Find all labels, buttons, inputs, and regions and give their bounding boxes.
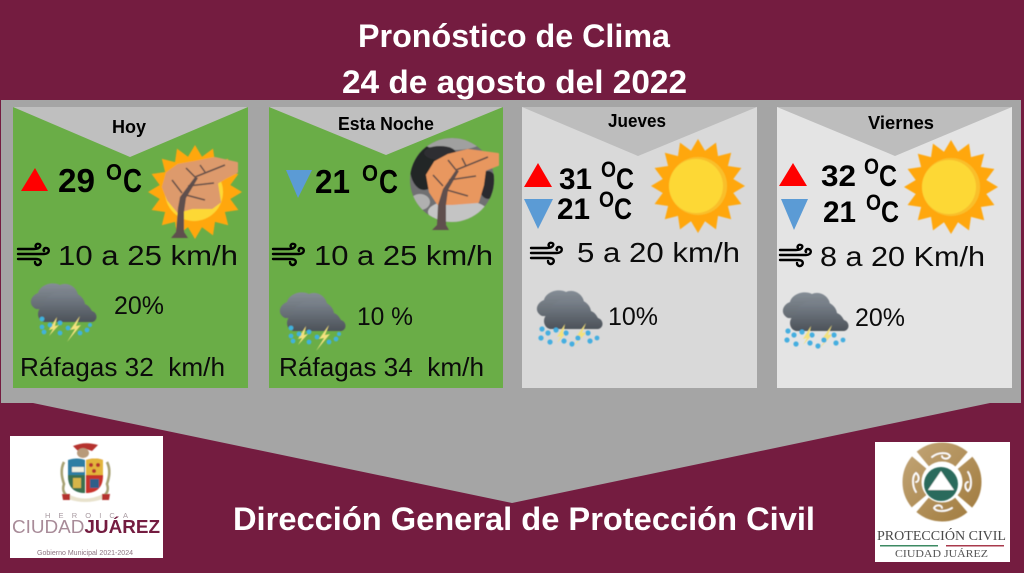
- rain probability: 20%: [114, 292, 164, 320]
- crest: [62, 443, 110, 502]
- high temperature: O: [864, 154, 879, 179]
- logo: Heroica Ciudad Juárez: [10, 436, 163, 558]
- wind speed: 10 a 25 km/h: [58, 240, 238, 271]
- text: Ciudad Juárez: CIUDAD JUÁREZ: [895, 548, 988, 560]
- high temperature: 32: [821, 160, 856, 193]
- icon: blue down triangle: [524, 199, 553, 229]
- text: Protección Civil: PROTECCIÓN CIVIL: [877, 527, 1006, 544]
- high temperature: O: [106, 159, 122, 185]
- low temperature: [557, 187, 632, 226]
- icon: wind: [531, 243, 562, 264]
- heading: Hoy: Hoy: [112, 117, 146, 137]
- title: Pronóstico de Clima: [358, 18, 670, 54]
- gray forecast band with chevron: [1, 100, 1021, 503]
- icon: storm cloud and rain: [537, 290, 602, 347]
- footer heading: Dirección General de Protección Civil: [233, 501, 815, 537]
- rain probability: 10 %: [357, 303, 413, 331]
- high temperature: [58, 159, 142, 199]
- low temperature: 21: [823, 196, 856, 229]
- high temperature: 29: [58, 162, 95, 199]
- low temperature: C: [881, 196, 899, 229]
- icon: wind: [273, 244, 304, 265]
- panel: Esta Noche: [269, 107, 503, 388]
- icon: wind: [780, 245, 811, 266]
- icon: sun: [651, 139, 745, 233]
- logo: Protección Civil: [875, 442, 1010, 562]
- low temperature: [315, 160, 398, 200]
- low temperature: C: [379, 163, 398, 200]
- icon: moon with windy tree: [410, 136, 498, 230]
- text: Ciudad Juárez: CIUDADJUÁREZ: [12, 516, 160, 537]
- high temperature: C: [879, 160, 897, 193]
- wind speed: 5 a 20 km/h: [577, 237, 740, 268]
- low temperature: 21: [557, 193, 590, 226]
- wind speed: 10 a 25 km/h: [314, 240, 493, 271]
- gusts: Ráfagas 32 km/h: [20, 352, 225, 382]
- gusts: Ráfagas 34 km/h: [279, 352, 484, 382]
- high temperature: C: [123, 162, 142, 199]
- heading: Jueves: Jueves: [608, 111, 666, 131]
- panel: Viernes: [777, 107, 1012, 388]
- high temperature: 31: [559, 163, 592, 196]
- heading: Viernes: Viernes: [868, 113, 934, 133]
- low temperature: O: [599, 187, 614, 212]
- high temperature: C: [616, 163, 634, 196]
- low temperature: O: [866, 190, 881, 215]
- icon: red up triangle: [779, 163, 807, 186]
- icon: blue down triangle: [286, 170, 312, 198]
- icon: sun: [904, 140, 998, 234]
- icon: wind: [18, 244, 49, 265]
- high temperature: O: [601, 157, 616, 182]
- title: [342, 18, 687, 100]
- high temperature: [559, 157, 634, 196]
- icon: storm cloud and rain: [783, 292, 848, 349]
- tricolor line: [880, 545, 938, 546]
- icon: red up triangle: [524, 163, 552, 187]
- low temperature: [823, 190, 899, 229]
- text: Gobierno Municipal: Gobierno Municipal 2021-2024: [37, 550, 133, 557]
- text: Heroica: HEROICA: [45, 511, 128, 520]
- panel: Hoy: [13, 107, 248, 388]
- heading: Esta Noche: Esta Noche: [338, 114, 434, 134]
- emblem: [912, 452, 972, 512]
- low temperature: 21: [315, 163, 350, 200]
- icon: storm cloud: [31, 283, 96, 342]
- icon: storm cloud: [280, 292, 346, 351]
- icon: sun with windy tree: [148, 145, 242, 239]
- rain probability: 20%: [855, 304, 905, 332]
- icon: red up triangle: [21, 168, 48, 191]
- wind speed: 8 a 20 Km/h: [820, 241, 985, 272]
- low temperature: O: [362, 160, 378, 186]
- high temperature: [821, 154, 897, 193]
- panel: Jueves: [522, 107, 757, 388]
- title: 24 de agosto del 2022: [342, 64, 687, 100]
- rain probability: 10%: [608, 303, 658, 331]
- low temperature: C: [614, 193, 632, 226]
- icon: blue down triangle: [781, 199, 808, 230]
